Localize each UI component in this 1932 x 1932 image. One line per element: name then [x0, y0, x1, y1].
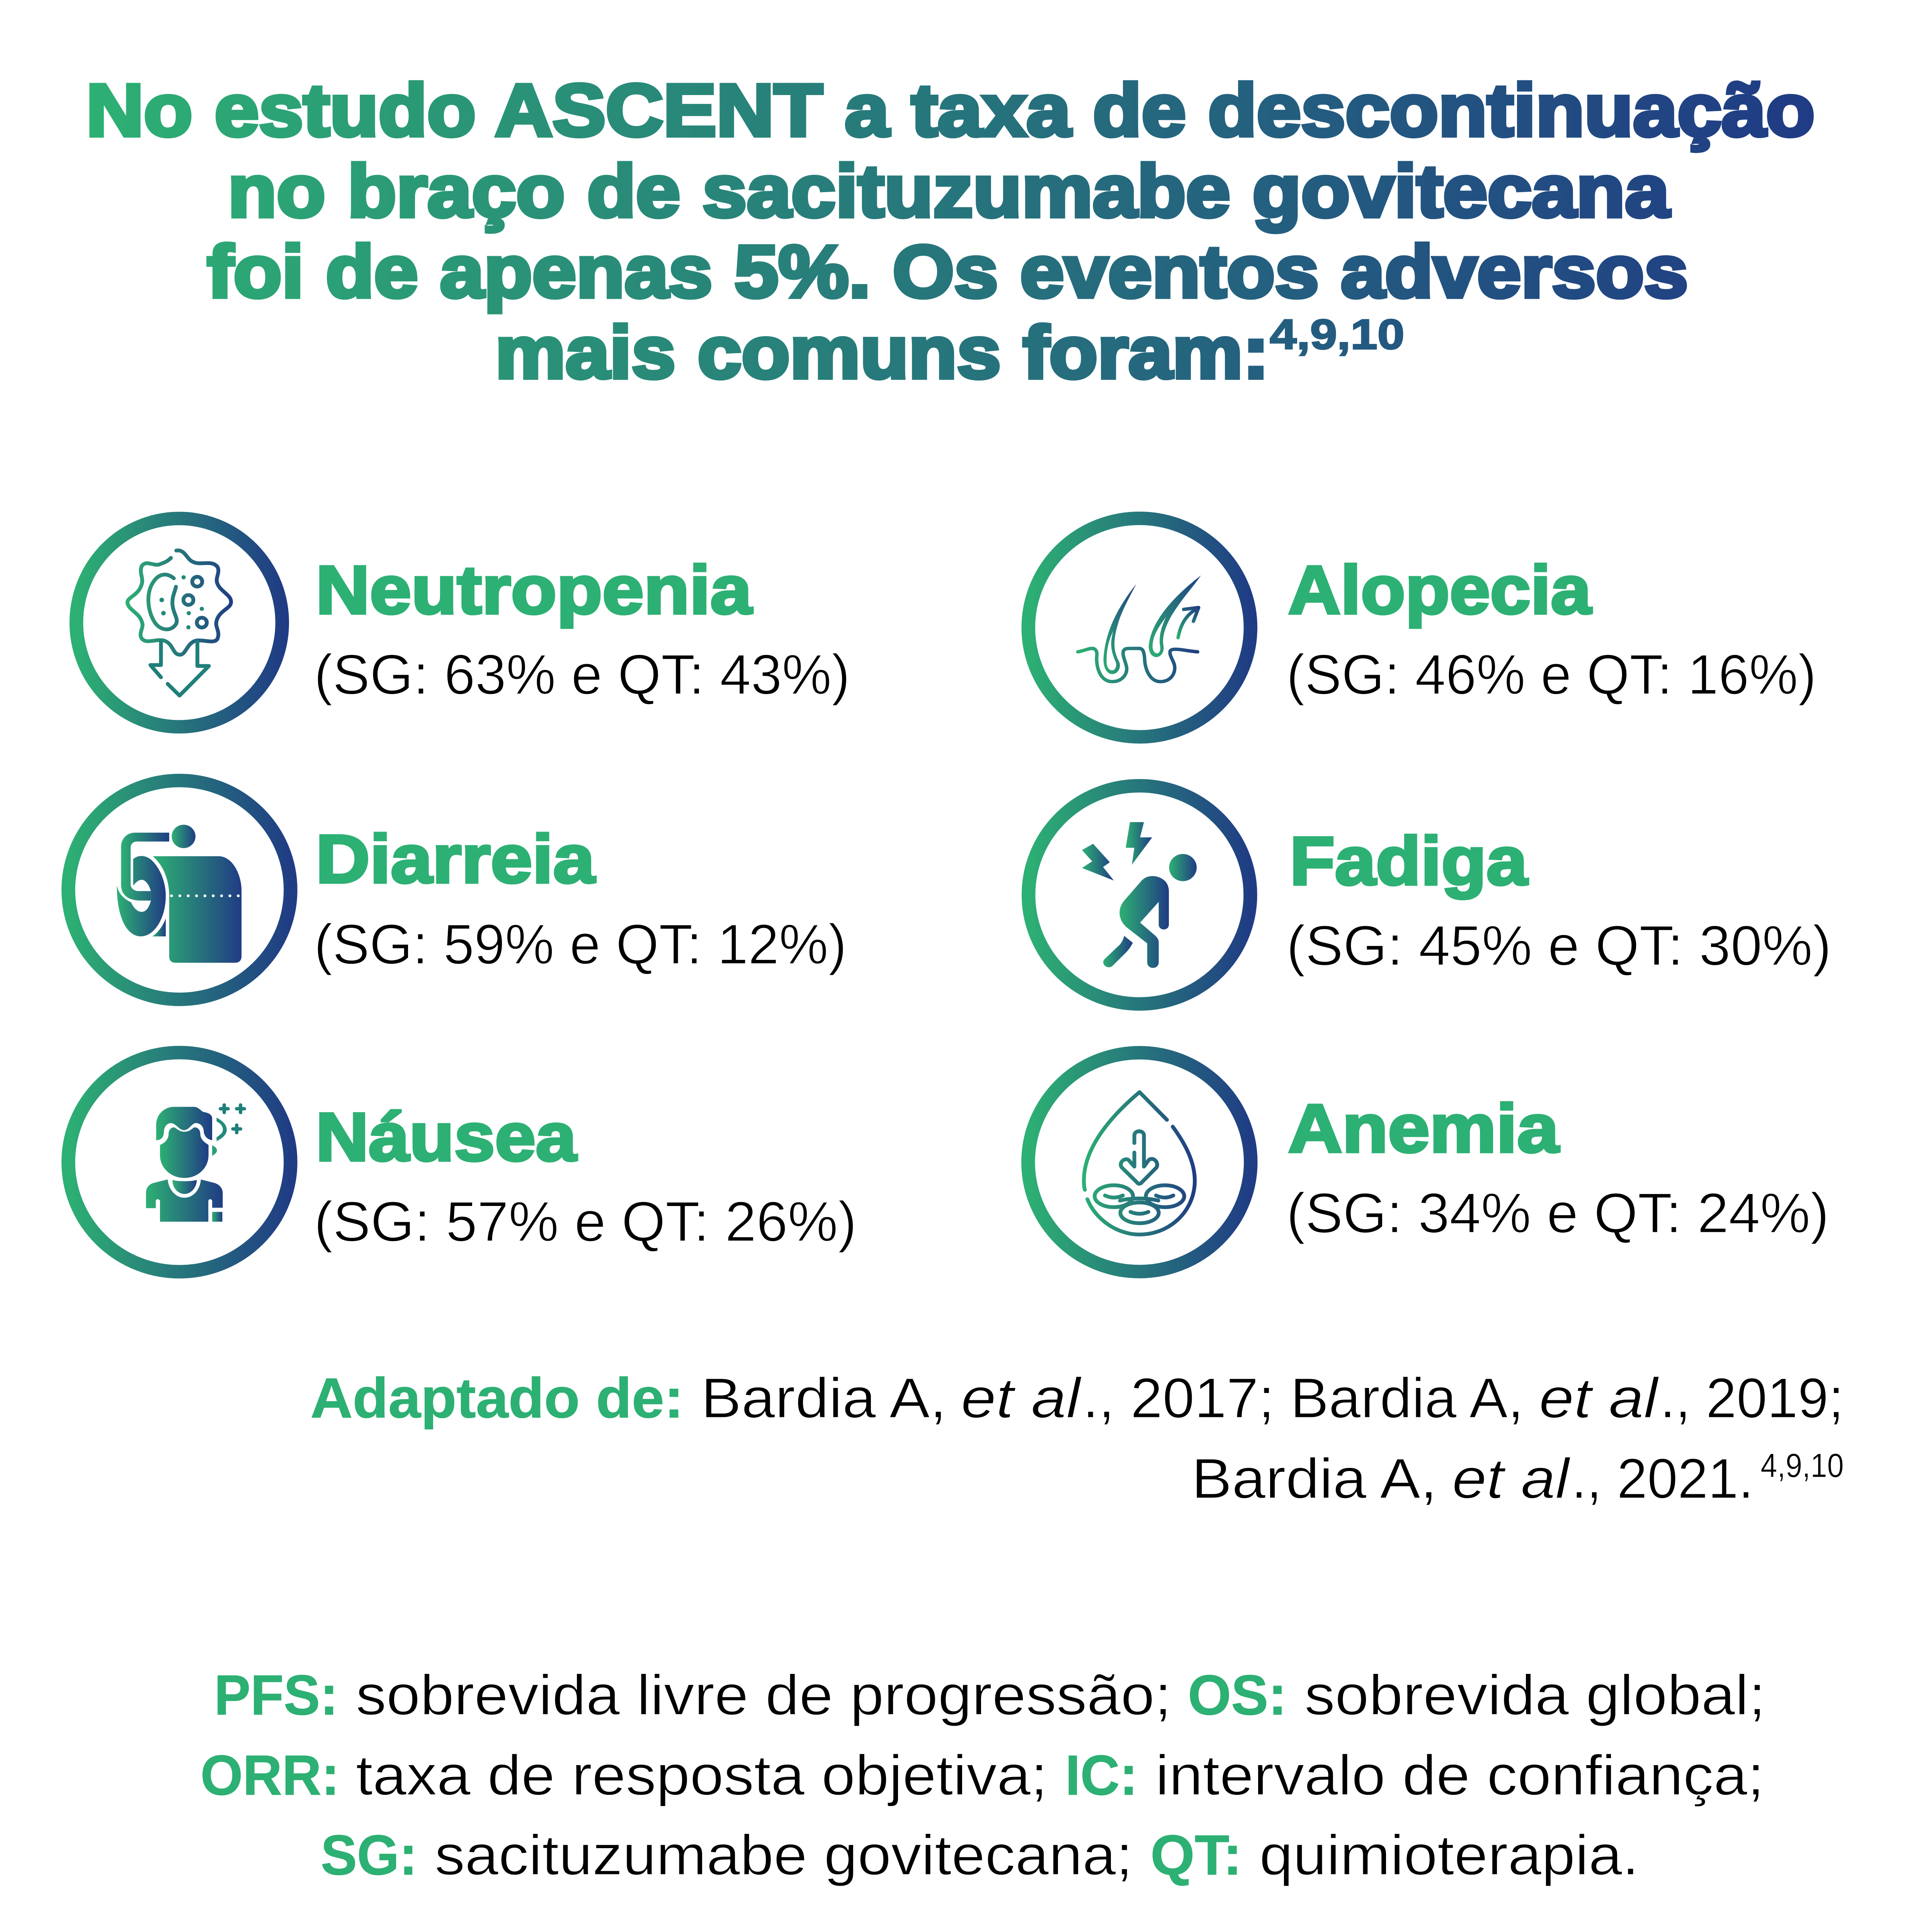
heading: alopecia: Alopecia: [1288, 552, 1592, 628]
text block: citation: ., 2021.: [1571, 1447, 1753, 1510]
text block: abbreviations: IC:: [1065, 1744, 1138, 1807]
text block: abbreviations: sobrevida global;: [1304, 1663, 1765, 1727]
text block: abbreviations: OS:: [1188, 1663, 1287, 1727]
text block: citation: et al: [961, 1366, 1082, 1430]
heading: nausea: Náusea: [316, 1099, 577, 1175]
text block: citation: 4,9,10: [1760, 1446, 1844, 1484]
title: [86, 69, 1815, 394]
panel: nausea: [68, 1053, 857, 1272]
text block: citation: ., 2017; Bardia A,: [1083, 1366, 1524, 1430]
text block: citation: ., 2019;: [1660, 1366, 1844, 1430]
heading: anemia: Anemia: [1288, 1090, 1560, 1167]
text block: abbreviations: intervalo de confiança;: [1155, 1744, 1764, 1807]
title: 4,9,10: [1270, 311, 1405, 358]
panel: neutropenia: [77, 519, 850, 727]
text: fadiga values: (SG: 45% e QT: 30%): [1286, 914, 1832, 977]
text block: citation: Adaptado de:: [310, 1366, 684, 1430]
text block: abbreviations: ORR:: [201, 1744, 340, 1807]
text: nausea values: (SG: 57% e QT: 26%): [314, 1190, 857, 1253]
text: alopecia values: (SG: 46% e QT: 16%): [1286, 643, 1816, 706]
heading: diarreia: Diarreia: [316, 821, 595, 897]
text block: citation: [310, 1366, 1844, 1510]
panel: alopecia: [1028, 518, 1816, 737]
icon: fadiga: [1029, 786, 1250, 1004]
text block: abbreviations: sobrevida livre de progressão;: [356, 1663, 1172, 1727]
icon: nausea: [68, 1053, 291, 1272]
title: foi de apenas 5%. Os eventos adversos: [207, 230, 1688, 313]
text block: abbreviations: taxa de resposta objetiva;: [356, 1744, 1048, 1807]
icon: anemia: [1028, 1053, 1251, 1272]
text block: citation: Bardia A,: [1192, 1447, 1437, 1510]
icon: alopecia: [1028, 518, 1250, 737]
text block: abbreviations: QT:: [1150, 1823, 1242, 1887]
text block: citation: et al: [1452, 1447, 1571, 1510]
text: anemia values: (SG: 34% e QT: 24%): [1286, 1182, 1829, 1245]
heading: neutropenia: Neutropenia: [316, 552, 753, 628]
icon: neutropenia: [77, 519, 282, 727]
text block: abbreviations: sacituzumabe govitecana;: [435, 1823, 1133, 1887]
text block: abbreviations: [201, 1663, 1765, 1887]
text block: abbreviations: PFS:: [214, 1663, 338, 1727]
text block: abbreviations: SG:: [321, 1823, 417, 1887]
text: neutropenia values: (SG: 63% e QT: 43%): [314, 643, 850, 706]
text: diarreia values: (SG: 59% e QT: 12%): [314, 913, 847, 976]
panel: fadiga: [1029, 786, 1832, 1004]
title: no braço de sacituzumabe govitecana: [228, 150, 1670, 232]
text block: abbreviations: quimioterapia.: [1259, 1823, 1639, 1887]
panel: anemia: [1028, 1053, 1829, 1272]
title: mais comuns foram:: [495, 311, 1269, 394]
icon: diarreia: [68, 781, 291, 999]
panel: diarreia: [68, 781, 847, 999]
text block: citation: Bardia A,: [701, 1366, 947, 1430]
title: No estudo ASCENT a taxa de descontinuação: [86, 69, 1815, 151]
heading: fadiga: Fadiga: [1290, 823, 1528, 899]
text block: citation: et al: [1539, 1366, 1660, 1430]
